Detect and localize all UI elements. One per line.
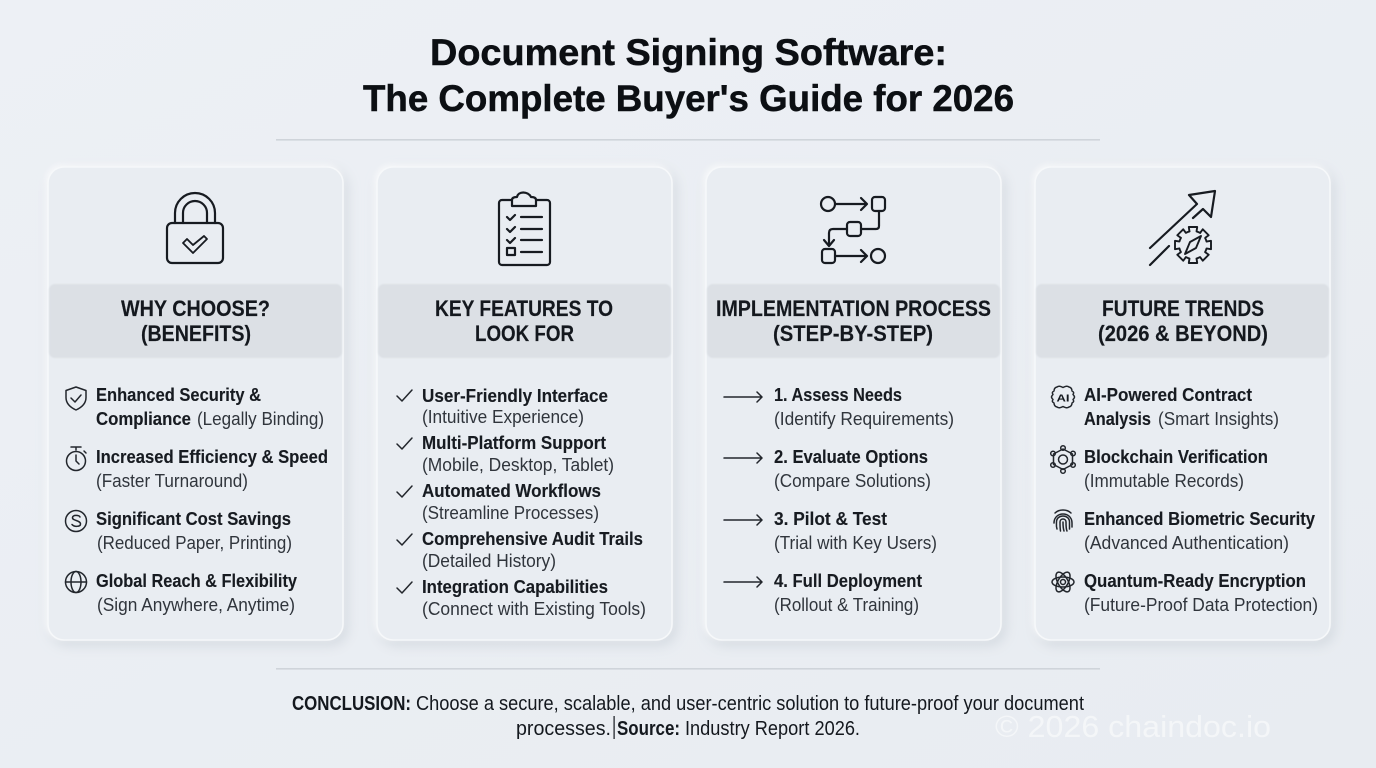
trend: blockchain verification: Blockchain Verification (1084, 446, 1268, 467)
panel: why choose (benefits) (48, 167, 343, 640)
feature: automated workflows (397, 480, 601, 523)
step 1: (Identify Requirements) (774, 408, 954, 429)
feature: audit trails: Comprehensive Audit Trails (422, 528, 643, 549)
heading band: future trends: FUTURE TRENDS (1102, 296, 1264, 321)
trend: blockchain verification (1051, 446, 1268, 491)
heading band: why choose (49, 284, 342, 358)
feature: audit trails: (Detailed History) (422, 550, 556, 571)
benefit: global reach (66, 570, 298, 615)
heading band: key features: KEY FEATURES TO (435, 296, 613, 321)
benefit: efficiency (66, 446, 328, 491)
trend: biometric security: (Advanced Authentication) (1084, 532, 1289, 553)
step 1: 1. Assess Needs (774, 384, 902, 405)
conclusion text: processes. (516, 718, 611, 740)
conclusion text: Choose a secure, scalable, and user-centric solution to future-proof your document (416, 693, 1084, 715)
trend: AI contract analysis: AI-Powered Contract (1084, 384, 1252, 405)
trend: quantum encryption: (Future-Proof Data Protection) (1084, 594, 1318, 615)
conclusion text: Source: (617, 718, 680, 740)
icon: padlock with check (167, 193, 223, 263)
heading band: key features: LOOK FOR (475, 321, 574, 346)
benefit: global reach: Global Reach & Flexibility (96, 570, 298, 591)
benefit: security (66, 384, 324, 429)
step 4 (724, 570, 922, 615)
benefit: security: Enhanced Security & (96, 384, 261, 405)
icon: clipboard checklist (499, 192, 550, 265)
feature: multi-platform support (397, 432, 614, 475)
step 2 (724, 446, 931, 491)
step 3: 3. Pilot & Test (774, 508, 887, 529)
step 4: (Rollout & Training) (774, 594, 919, 615)
step 2: (Compare Solutions) (774, 470, 931, 491)
step 2: 2. Evaluate Options (774, 446, 928, 467)
feature: integration: (Connect with Existing Tools) (422, 598, 646, 619)
feature: integration: Integration Capabilities (422, 576, 608, 597)
feature: automated workflows: Automated Workflows (422, 480, 601, 501)
title: The Complete Buyer's Guide for 2026 (363, 78, 1014, 119)
step 1 (724, 384, 954, 429)
trend: AI contract analysis: Analysis (1084, 408, 1151, 429)
trend: AI contract analysis: AI (1056, 392, 1070, 404)
feature: audit trails (397, 528, 643, 571)
step 4: 4. Full Deployment (774, 570, 922, 591)
feature: multi-platform support: (Mobile, Desktop, Tablet) (422, 454, 614, 475)
step 3: (Trial with Key Users) (774, 532, 937, 553)
feature: integration (397, 576, 646, 619)
benefit: cost savings (66, 508, 292, 553)
feature: automated workflows: (Streamline Processes) (422, 502, 599, 523)
trend: blockchain verification: (Immutable Records) (1084, 470, 1244, 491)
trend: biometric security: Enhanced Biometric Security (1084, 508, 1316, 529)
panel: implementation process (706, 167, 1001, 640)
heading band: implementation: (STEP-BY-STEP) (773, 321, 933, 346)
benefit: security: (Legally Binding) (197, 408, 324, 429)
icon: upward arrow with compass gear (1150, 191, 1215, 265)
benefit: efficiency: (Faster Turnaround) (96, 470, 248, 491)
feature: user-friendly interface: (Intuitive Experience) (422, 406, 584, 427)
icon: process flow (821, 197, 885, 263)
feature: user-friendly interface (397, 385, 608, 427)
title: Document Signing Software: (430, 32, 947, 73)
benefit: cost savings: (Reduced Paper, Printing) (97, 532, 292, 553)
step 3 (724, 508, 937, 553)
conclusion text: CONCLUSION: (292, 693, 411, 715)
trend: AI contract analysis (1052, 384, 1279, 429)
heading band: why choose: (BENEFITS) (141, 321, 251, 346)
heading band: future trends (1036, 284, 1329, 358)
benefit: cost savings: Significant Cost Savings (96, 508, 291, 529)
benefit: global reach: (Sign Anywhere, Anytime) (97, 594, 295, 615)
benefit: security: Compliance (96, 408, 191, 429)
benefit: efficiency: Increased Efficiency & Speed (96, 446, 328, 467)
trend: AI contract analysis: (Smart Insights) (1158, 408, 1279, 429)
conclusion text: Industry Report 2026. (685, 718, 860, 740)
heading band: key features (378, 284, 671, 358)
panel: key features (377, 167, 672, 640)
heading band: implementation (707, 284, 1000, 358)
feature: multi-platform support: Multi-Platform Support (422, 432, 606, 453)
trend: quantum encryption (1052, 570, 1318, 615)
trend: biometric security (1054, 508, 1316, 553)
conclusion text (292, 693, 1084, 740)
heading band: why choose: WHY CHOOSE? (121, 296, 270, 321)
trend: quantum encryption: Quantum-Ready Encryption (1084, 570, 1306, 591)
watermark: © 2026 chaindoc.io (995, 709, 1271, 744)
panel: future trends (1035, 167, 1330, 640)
feature: user-friendly interface: User-Friendly Interface (422, 385, 608, 406)
title (363, 32, 1014, 119)
heading band: implementation: IMPLEMENTATION PROCESS (716, 296, 991, 321)
heading band: future trends: (2026 & BEYOND) (1098, 321, 1268, 346)
